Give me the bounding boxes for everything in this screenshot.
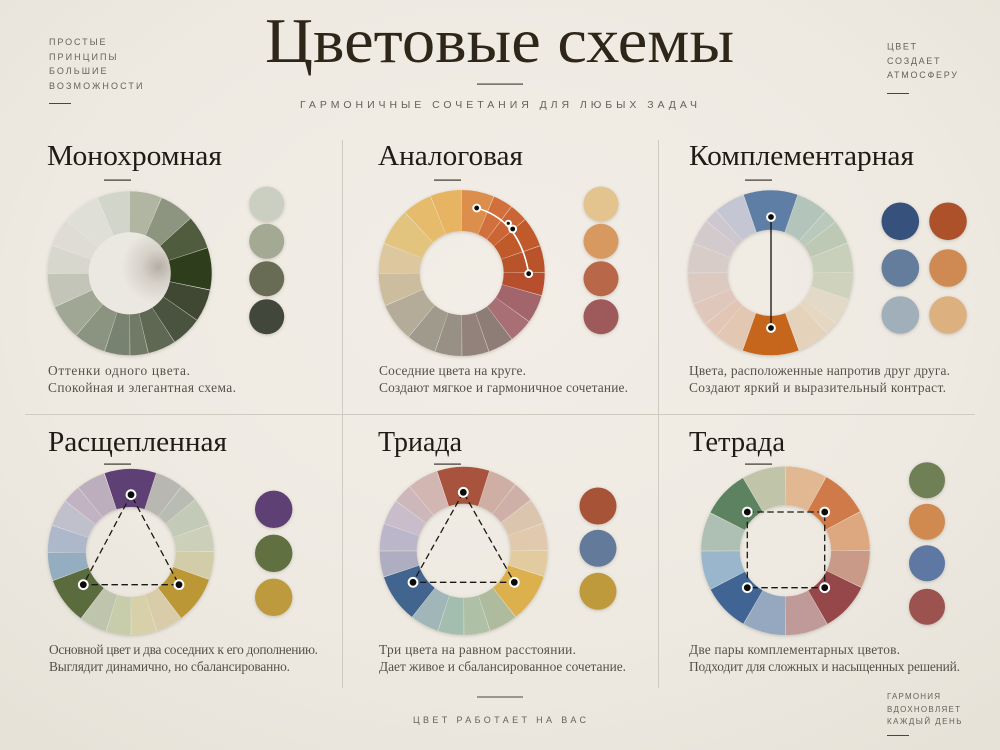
description [49,642,318,674]
description: Две пары комплементарных цветов. [689,642,900,657]
panel: analogous [373,141,628,395]
color wheel [682,184,859,361]
footer [413,692,962,736]
heading: Расщепленная [48,427,227,458]
description: Основной цвет и два соседних к его дополнению. [49,642,318,657]
bottom right note: ВДОХНОВЛЯЕТ [887,705,960,714]
top left note: ВОЗМОЖНОСТИ [49,81,142,91]
panel: split complementary [41,427,318,674]
bottom right note [887,692,962,736]
panel: triad [371,427,626,674]
color wheel [43,186,217,360]
complement line with markers [767,213,775,332]
top right note: СОЗДАЕТ [887,56,940,66]
footer caption: ЦВЕТ РАБОТАЕТ НА ВАС [413,715,586,725]
heading: Триада [378,427,463,458]
swatches [255,491,292,616]
description: Соседние цвета на круге. [379,363,526,378]
swatches [584,186,618,334]
heading: Монохромная [47,141,222,172]
heading: Тетрада [689,427,786,458]
top right note: АТМОСФЕРУ [887,70,957,80]
bottom right note: КАЖДЫЙ ДЕНЬ [887,717,962,726]
description: Цвета, расположенные напротив друг друга. [689,363,950,378]
description: Подходит для сложных и насыщенных решений. [689,659,960,674]
top left note: БОЛЬШИЕ [49,66,106,76]
description [379,363,628,395]
description: Создают яркий и выразительный контраст. [689,380,946,395]
arc with markers [473,205,532,277]
color wheel [697,462,874,640]
heading: Аналоговая [378,141,523,172]
top left note [49,37,142,104]
swatches [882,202,967,334]
panel: complementary [682,141,967,395]
description: Спокойная и элегантная схема. [48,380,236,395]
panel: monochrome [43,141,284,395]
swatches [909,462,945,625]
color wheel [41,462,221,642]
description [48,363,236,395]
description [379,642,626,674]
triangle with markers [79,490,183,589]
description: Выглядит динамично, но сбалансированно. [49,659,290,674]
description: Оттенки одного цвета. [48,363,190,378]
heading: Комплементарная [689,141,914,172]
header [49,6,957,111]
top left note: ПРОСТЫЕ [49,37,106,47]
description [689,642,960,674]
color wheel [373,185,550,361]
square with markers [743,508,829,592]
panel: tetrad [689,427,960,674]
triangle with markers [409,488,519,587]
top right note: ЦВЕТ [887,42,916,52]
bottom right note: ГАРМОНИЯ [887,692,940,701]
description: Дает живое и сбалансированное сочетание. [379,659,626,674]
top right note [887,42,957,94]
swatches [249,186,284,334]
description [689,363,950,395]
description: Три цвета на равном расстоянии. [379,642,576,657]
color wheel [371,459,556,643]
title: Цветовые схемы [265,6,734,77]
subtitle: ГАРМОНИЧНЫЕ СОЧЕТАНИЯ ДЛЯ ЛЮБЫХ ЗАДАЧ [300,99,697,111]
description: Создают мягкое и гармоничное сочетание. [379,380,628,395]
top left note: ПРИНЦИПЫ [49,52,117,62]
swatches [580,488,616,610]
